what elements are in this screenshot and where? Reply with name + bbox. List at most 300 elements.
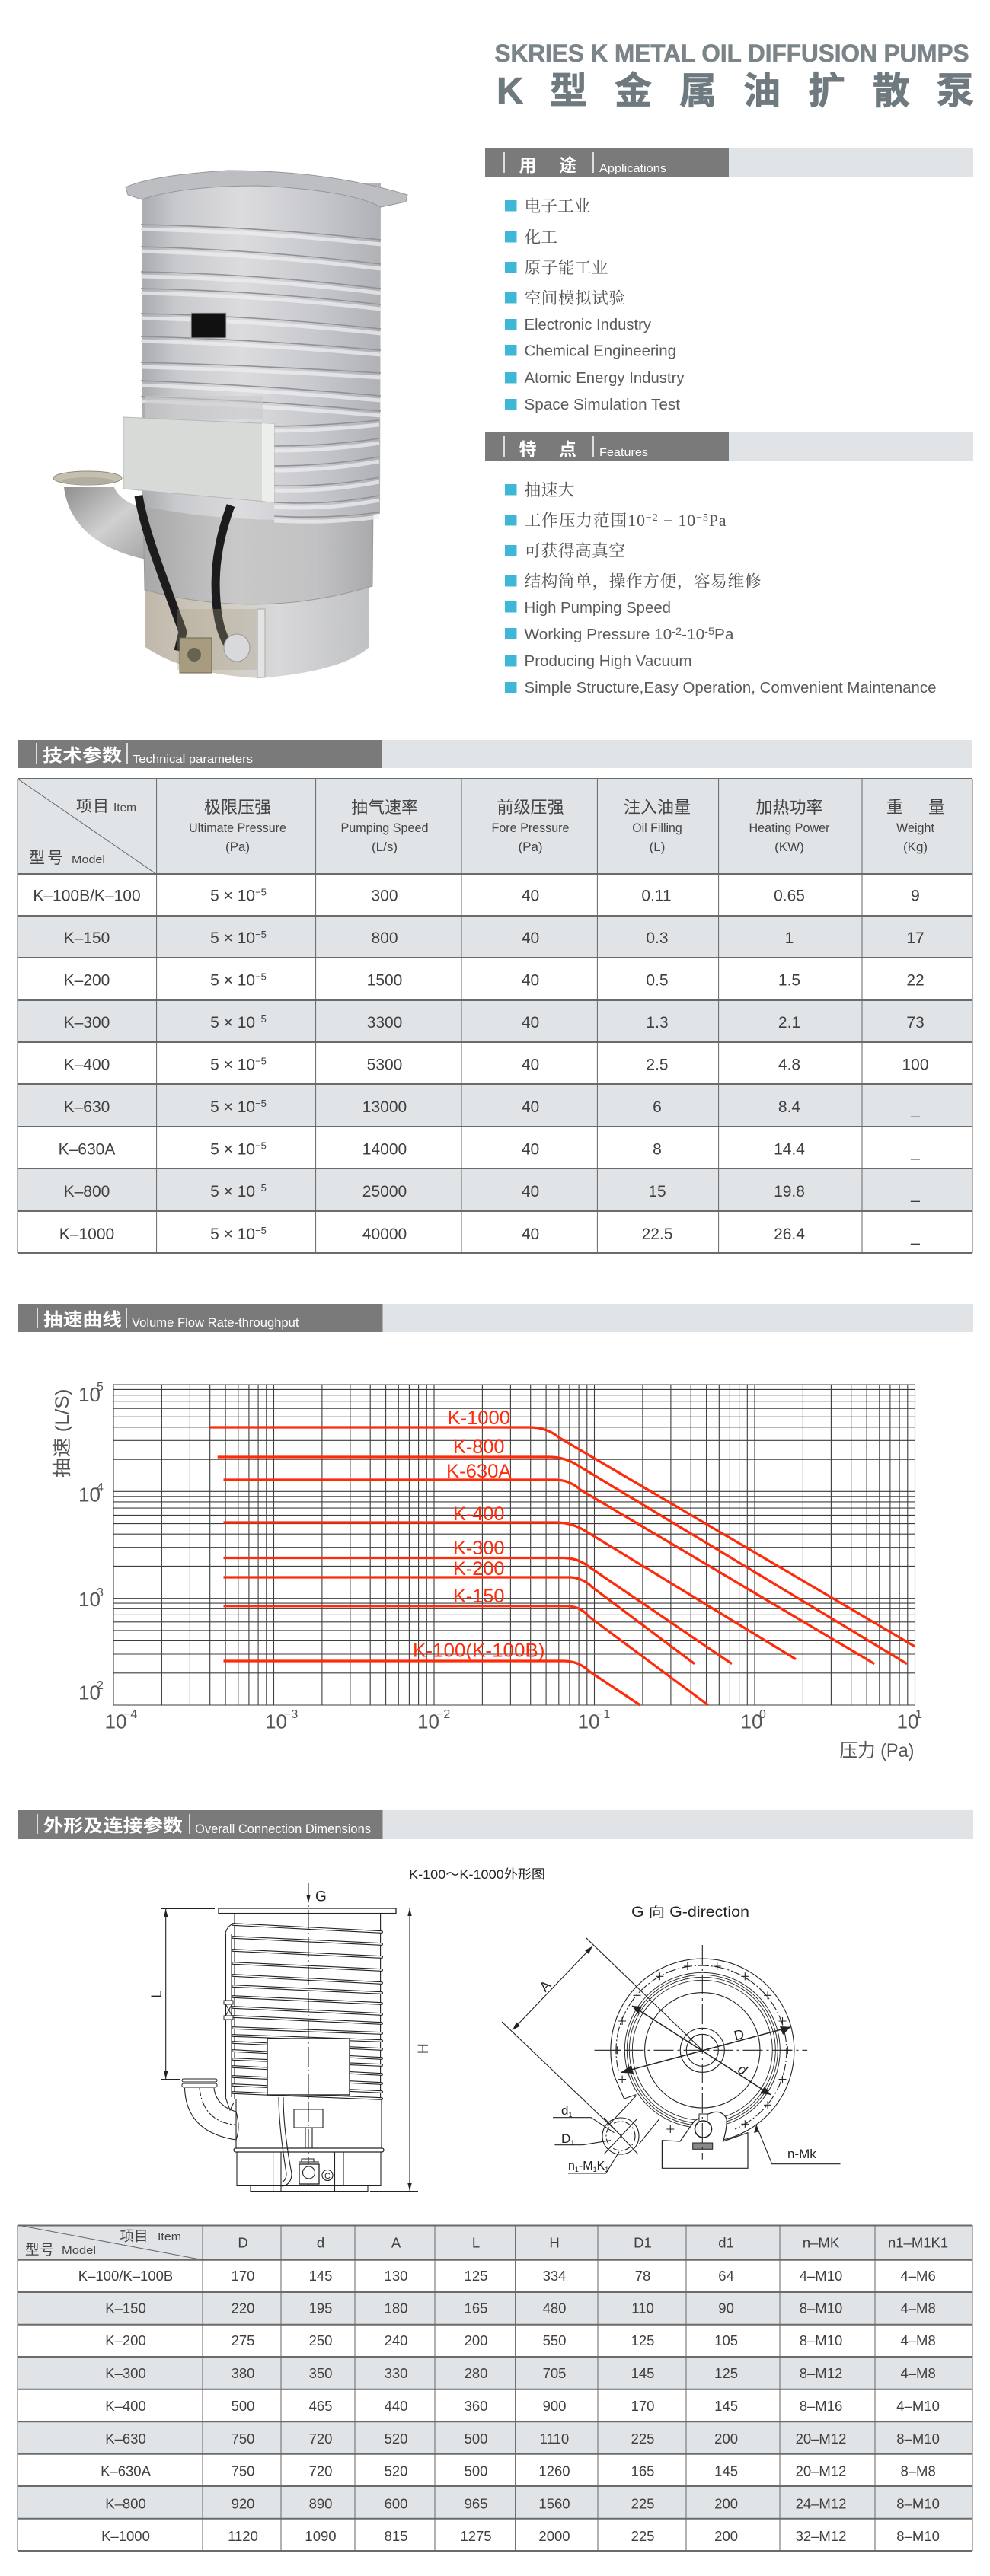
- applications list: Chemical Engineering: [524, 343, 676, 359]
- section header: overall connection dimensions: Overall Connection Dimensions: [195, 1822, 371, 1836]
- table rows: 5 × 10: [210, 1140, 255, 1159]
- table rows: 24–M12: [796, 2495, 846, 2512]
- table rows: K–800: [105, 2495, 146, 2512]
- x-axis ticks: 1: [915, 1708, 922, 1721]
- table rows: [78, 2268, 940, 2544]
- table header: 抽气速率: [351, 798, 418, 817]
- applications list: Space Simulation Test: [524, 397, 680, 413]
- features list: Pa: [714, 626, 734, 643]
- applications list: 空间模拟试验: [524, 289, 625, 308]
- dimension D: [621, 2026, 790, 2074]
- table rows: 225: [631, 2495, 654, 2512]
- table rows: 300: [371, 888, 398, 904]
- table rows: 0.65: [774, 888, 805, 904]
- flange: [219, 1908, 396, 1914]
- table rows: 40: [522, 888, 539, 904]
- table rows: 480: [543, 2300, 566, 2316]
- features list: 结构简单，操作方便，容易维修: [524, 572, 762, 591]
- x-axis ticks: 10: [577, 1710, 599, 1733]
- table header: 加热功率: [755, 798, 823, 817]
- label D1: [554, 2131, 611, 2147]
- table rows: _: [910, 1185, 920, 1203]
- table rows: 1090: [305, 2528, 337, 2544]
- table rows: 1260: [538, 2463, 570, 2479]
- table header: [29, 798, 945, 867]
- table rows: 40: [522, 971, 539, 990]
- section header: applications: [485, 148, 973, 177]
- top flange: [126, 171, 407, 207]
- y-axis ticks: 10: [78, 1483, 101, 1506]
- table rows: 14.4: [774, 1140, 805, 1159]
- applications list: 化工: [524, 228, 557, 247]
- curve labels: K-150: [453, 1586, 504, 1607]
- table rows: 110: [631, 2300, 654, 2316]
- table rows: K–200: [105, 2332, 146, 2348]
- bolt marks: [613, 1962, 791, 2133]
- dimension D: D: [733, 2026, 746, 2044]
- table rows: −5: [255, 1182, 267, 1194]
- table rows: 40: [522, 1183, 539, 1200]
- section header: features: 特: [519, 439, 536, 459]
- table rows: 32–M12: [796, 2528, 846, 2544]
- chinese title: 散: [873, 71, 910, 112]
- table shading: [18, 2225, 972, 2519]
- table rows: 3300: [367, 1014, 402, 1031]
- clamp: [693, 2114, 713, 2149]
- table header: Item: [113, 802, 136, 815]
- table rows: −5: [255, 1098, 267, 1109]
- dimension L: [149, 1909, 215, 2080]
- table rows: K–150: [105, 2300, 146, 2316]
- table rows: 220: [232, 2300, 254, 2316]
- table rows: 78: [635, 2268, 650, 2284]
- lower band: [234, 2148, 384, 2152]
- table rows: 800: [371, 929, 398, 947]
- table rows: 180: [385, 2300, 407, 2316]
- chinese title: 油: [743, 71, 781, 112]
- table rows: 5 × 10: [210, 888, 255, 904]
- section header: applications: Applications: [599, 162, 666, 175]
- upper body: [142, 183, 381, 520]
- valves on tube: [224, 2001, 233, 2020]
- table rows: 20–M12: [796, 2463, 846, 2479]
- table rows: 22.5: [642, 1226, 672, 1243]
- table rows: 165: [631, 2463, 654, 2479]
- features list: -5: [704, 625, 714, 637]
- section header: applications: 用: [519, 155, 536, 175]
- features list: Simple Structure,Easy Operation, Comvenient Maintenance: [524, 680, 937, 697]
- chinese title: 属: [679, 71, 717, 112]
- table rows: 40: [522, 1098, 539, 1116]
- curve labels: K-300: [453, 1538, 504, 1559]
- label D1: 1: [570, 2139, 574, 2147]
- technical parameters table: [18, 779, 972, 1253]
- elbow pipe: [53, 471, 155, 561]
- table rows: 22: [906, 971, 925, 990]
- table rows: 14000: [362, 1140, 407, 1159]
- english title: SKRIES K METAL OIL DIFFUSION PUMPS: [495, 40, 969, 67]
- y-axis ticks: [78, 1381, 104, 1704]
- table rows: 8–M12: [800, 2365, 842, 2381]
- section header: features: 点: [559, 439, 576, 459]
- table header: n1–M1K1: [888, 2235, 948, 2250]
- table rows: 2.1: [778, 1014, 800, 1031]
- label n1-M1K1: -M: [579, 2160, 593, 2173]
- drawing caption: K-100～K-1000外形图: [409, 1867, 545, 1882]
- nozzle block: [662, 2112, 748, 2168]
- x-axis ticks: 10: [105, 1710, 126, 1733]
- section header: volume flow rate: [18, 1304, 973, 1332]
- table rows: _: [910, 1228, 920, 1245]
- table rows: 965: [465, 2495, 487, 2512]
- coils: [233, 1924, 382, 2099]
- table rows: 520: [385, 2463, 407, 2479]
- x-axis ticks: 10: [265, 1710, 287, 1733]
- table rows: 8–M10: [896, 2528, 940, 2544]
- table rows: 64: [718, 2268, 734, 2284]
- table rows: 750: [232, 2431, 254, 2447]
- features list: −2: [646, 512, 658, 524]
- y-axis ticks: 5: [97, 1381, 104, 1394]
- small box and stem: [294, 2109, 323, 2148]
- section header: technical parameters: Technical parameters: [133, 753, 253, 766]
- table rows: −5: [255, 971, 267, 982]
- y-axis ticks: 2: [97, 1679, 104, 1692]
- table rows: 5 × 10: [210, 1183, 255, 1200]
- table header: Ultimate Pressure: [189, 821, 286, 835]
- y-axis ticks: 4: [97, 1481, 104, 1494]
- table rows: 15: [648, 1183, 666, 1200]
- table rows: K–800: [64, 1183, 110, 1200]
- dimension d: [632, 2006, 771, 2095]
- table rows: K–630: [105, 2431, 146, 2447]
- dimension d: d: [736, 2061, 750, 2078]
- table rows: K–630A: [101, 2463, 152, 2479]
- table rows: K–400: [105, 2398, 146, 2414]
- table rows: 330: [385, 2365, 407, 2381]
- table rows: 40: [522, 1057, 539, 1073]
- table rows: 4–M6: [900, 2268, 936, 2284]
- applications list: 原子能工业: [524, 259, 608, 277]
- label n1-M1K1: 1: [605, 2166, 608, 2173]
- label n1-M1K1: 1: [593, 2166, 597, 2173]
- table rows: 0.5: [646, 971, 669, 990]
- x-axis ticks: 10: [897, 1710, 918, 1733]
- rings: [611, 1959, 794, 2140]
- label d1: 1: [568, 2111, 572, 2119]
- table rows: 750: [232, 2463, 254, 2479]
- table header: D1: [634, 2235, 652, 2250]
- table rows: 5 × 10: [210, 1014, 255, 1031]
- y-axis title: 抽速 (L/S): [52, 1388, 73, 1478]
- table rows: 600: [385, 2495, 407, 2512]
- curve labels: K-630A: [446, 1461, 512, 1482]
- table rows: −5: [255, 1013, 267, 1025]
- y-axis ticks: 10: [78, 1681, 101, 1704]
- dimension L: L: [149, 1990, 165, 1998]
- curve labels: [413, 1408, 545, 1661]
- label d1: [553, 2103, 614, 2133]
- table header: A: [391, 2235, 401, 2250]
- center lines: [594, 1945, 807, 2160]
- chart grid: [113, 1385, 915, 1705]
- center line: [308, 1883, 309, 2185]
- table rows: 170: [631, 2398, 654, 2414]
- table rows: K–100/K–100B: [78, 2268, 173, 2284]
- table header: Oil Filling: [632, 821, 682, 835]
- table header: H: [549, 2235, 560, 2250]
- table rows: 8–M10: [800, 2300, 842, 2316]
- applications list: 电子工业: [524, 197, 591, 215]
- table rows: 250: [309, 2332, 332, 2348]
- applications list: Atomic Energy Industry: [524, 370, 684, 387]
- features list: -10: [682, 626, 704, 643]
- table rows: 125: [631, 2332, 654, 2348]
- G arrow: [306, 1889, 327, 1905]
- table rows: 8–M10: [896, 2495, 940, 2512]
- table rows: 1.3: [646, 1014, 669, 1031]
- table rows: 125: [714, 2365, 738, 2381]
- label D1: D: [561, 2131, 570, 2146]
- table header: Item: [158, 2230, 181, 2243]
- label n1-M1K1: n: [568, 2160, 575, 2173]
- dimension H: H: [416, 2043, 432, 2054]
- table header: Weight: [896, 821, 934, 835]
- table header: D: [238, 2235, 248, 2250]
- section header: volume flow rate: Volume Flow Rate-throughput: [132, 1315, 299, 1330]
- x-axis title: 压力 (Pa): [839, 1740, 914, 1761]
- chart: pumping speed vs pressure: [52, 1381, 922, 1761]
- table rows: 1120: [228, 2528, 258, 2544]
- table header: 项目: [76, 798, 109, 815]
- label d1: d: [561, 2103, 568, 2118]
- table rows: 2000: [538, 2528, 570, 2544]
- table header: Fore Pressure: [492, 821, 570, 835]
- small flange detail: [602, 2096, 659, 2154]
- table rules: [18, 2226, 972, 2551]
- features list: − 10: [659, 512, 695, 530]
- section header: volume flow rate: 抽速曲线: [43, 1309, 122, 1329]
- table rows: −5: [255, 1225, 267, 1236]
- features list: 抽速大: [524, 481, 575, 499]
- table rows: 5 × 10: [210, 929, 255, 947]
- table rows: K–300: [105, 2365, 146, 2381]
- x-axis ticks: −3: [284, 1708, 298, 1721]
- table rows: 19.8: [774, 1183, 805, 1200]
- table rows: 4–M8: [900, 2365, 936, 2381]
- table rows: 225: [631, 2528, 654, 2544]
- x-axis ticks: −4: [123, 1708, 137, 1721]
- x-axis ticks: [105, 1708, 922, 1733]
- table rows: 73: [906, 1014, 925, 1031]
- chinese title: K: [497, 71, 523, 112]
- section header: applications: 途: [559, 155, 576, 175]
- table rows: 4–M10: [800, 2268, 842, 2284]
- table rows: 465: [309, 2398, 332, 2414]
- table header: 型号: [25, 2242, 54, 2258]
- table header: 项目: [120, 2228, 148, 2244]
- chinese title: 扩: [808, 71, 845, 112]
- table rows: −5: [255, 886, 267, 898]
- table rows: 280: [465, 2365, 487, 2381]
- curve labels: K-400: [453, 1503, 504, 1525]
- chinese title: 金: [615, 71, 652, 112]
- drawing: side elevation: [149, 1883, 432, 2192]
- table rows: 500: [465, 2431, 487, 2447]
- features list: 工作压力范围10: [524, 512, 645, 530]
- table rows: 40: [522, 1226, 539, 1243]
- x-axis ticks: −1: [596, 1708, 610, 1721]
- section header: features: [485, 432, 973, 461]
- table header: Heating Power: [749, 821, 830, 835]
- y-axis ticks: 10: [78, 1588, 101, 1611]
- table header: d1: [718, 2235, 734, 2250]
- table rows: 5 × 10: [210, 1057, 255, 1073]
- table rows: −5: [255, 1140, 267, 1151]
- table rows: 440: [385, 2398, 407, 2414]
- table rows: −5: [255, 929, 267, 940]
- junction: [299, 2159, 333, 2184]
- table rows: 500: [232, 2398, 254, 2414]
- table header: 型号: [29, 850, 63, 867]
- table header: 极限压强: [204, 798, 271, 817]
- table header: (Pa): [518, 840, 543, 854]
- table rows: 920: [232, 2495, 254, 2512]
- table rows: 4–M8: [900, 2332, 936, 2348]
- features list: Producing High Vacuum: [524, 653, 691, 670]
- table rows: 130: [385, 2268, 407, 2284]
- black label: [191, 313, 226, 338]
- table rows: 334: [543, 2268, 566, 2284]
- x-axis ticks: 10: [417, 1710, 439, 1733]
- table rows: 165: [465, 2300, 487, 2316]
- table rows: 0.3: [646, 929, 669, 947]
- cable: [278, 2096, 292, 2186]
- table rows: 6: [653, 1098, 662, 1116]
- table header: Model: [72, 853, 105, 866]
- table rows: 170: [232, 2268, 254, 2284]
- features list: High Pumping Speed: [524, 600, 671, 617]
- table rows: 8–M8: [900, 2463, 936, 2479]
- features list: -2: [672, 625, 682, 637]
- table header: (Pa): [225, 840, 250, 854]
- cooling coils: [141, 225, 381, 521]
- table header: L: [472, 2235, 480, 2250]
- dimensions table: [18, 2225, 972, 2551]
- table rows: 8–M16: [800, 2398, 842, 2414]
- table rows: 200: [714, 2495, 738, 2512]
- table rows: 8–M10: [800, 2332, 842, 2348]
- table rows: 145: [309, 2268, 332, 2284]
- table rows: −5: [255, 1055, 267, 1067]
- table header: 前级压强: [497, 798, 564, 817]
- table rows: K–100B/K–100: [33, 888, 141, 904]
- curve labels: K-100(K-100B): [413, 1640, 545, 1661]
- table rows: 40: [522, 1014, 539, 1031]
- table rows: 145: [714, 2463, 738, 2479]
- table rows: 17: [906, 929, 925, 947]
- base: [237, 2152, 381, 2192]
- table rows: 705: [543, 2365, 566, 2381]
- table rows: 240: [385, 2332, 407, 2348]
- dimension A: [502, 1938, 702, 2135]
- base panel and junction: [177, 609, 265, 677]
- label n-Mk: n-Mk: [787, 2147, 816, 2161]
- label n1-M1K1: 1: [575, 2166, 579, 2173]
- table header: (L/s): [372, 840, 398, 854]
- table rows: 2.5: [646, 1057, 669, 1073]
- G arrow: G: [315, 1889, 327, 1905]
- table rows: 890: [309, 2495, 332, 2512]
- curves: [210, 1427, 915, 1705]
- table rows: 5 × 10: [210, 1226, 255, 1243]
- cables: [139, 496, 231, 651]
- table shading: [18, 779, 972, 1211]
- label n-Mk: [754, 2125, 841, 2164]
- table rows: 145: [714, 2398, 738, 2414]
- table rows: 145: [631, 2365, 654, 2381]
- table rows: K–300: [64, 1014, 110, 1031]
- terminal box: [123, 396, 274, 502]
- curve labels: K-800: [453, 1436, 504, 1458]
- title: [495, 40, 974, 112]
- product photo: pump: [53, 171, 407, 678]
- table rows: K–630A: [59, 1140, 115, 1159]
- table rows: K–630: [64, 1098, 110, 1116]
- table rows: 520: [385, 2431, 407, 2447]
- x-axis ticks: 10: [740, 1710, 762, 1733]
- pump outline: [235, 1914, 382, 2148]
- table rows: 25000: [362, 1183, 407, 1200]
- table rows: 4–M8: [900, 2300, 936, 2316]
- table header: 重: [886, 798, 903, 817]
- table rows: 1560: [538, 2495, 570, 2512]
- table header: (L): [650, 840, 665, 854]
- section header: overall connection dimensions: 外形及连接参数: [43, 1816, 183, 1835]
- table header: (KW): [774, 840, 804, 854]
- dimension A: A: [537, 1978, 554, 1994]
- table rows: K–400: [64, 1057, 110, 1073]
- section header: overall connection dimensions: [18, 1810, 973, 1839]
- table rows: 8: [653, 1140, 662, 1159]
- table header: (Kg): [903, 840, 928, 854]
- table rows: 380: [232, 2365, 254, 2381]
- table rows: 720: [309, 2431, 332, 2447]
- y-axis ticks: 3: [97, 1586, 104, 1599]
- table rows: 5300: [367, 1057, 402, 1073]
- table rows: 8.4: [778, 1098, 800, 1116]
- table rows: 815: [385, 2528, 407, 2544]
- base skirt: [145, 586, 369, 678]
- table rows: 26.4: [774, 1226, 805, 1243]
- features list: Pa: [709, 512, 727, 530]
- table rows: [33, 886, 929, 1245]
- table rows: 4–M10: [896, 2398, 940, 2414]
- label n1-M1K1: [568, 2152, 619, 2173]
- table header: d: [317, 2235, 324, 2250]
- table rows: 200: [714, 2528, 738, 2544]
- table rows: 225: [631, 2431, 654, 2447]
- table rows: 40: [522, 929, 539, 947]
- table rows: 1500: [367, 971, 402, 990]
- table rows: 900: [543, 2398, 566, 2414]
- chinese title: 泵: [937, 71, 974, 112]
- table rows: 200: [714, 2431, 738, 2447]
- table rows: _: [910, 1143, 920, 1160]
- table rows: 1110: [540, 2431, 569, 2447]
- control box: [267, 2039, 350, 2095]
- table rows: 20–M12: [796, 2431, 846, 2447]
